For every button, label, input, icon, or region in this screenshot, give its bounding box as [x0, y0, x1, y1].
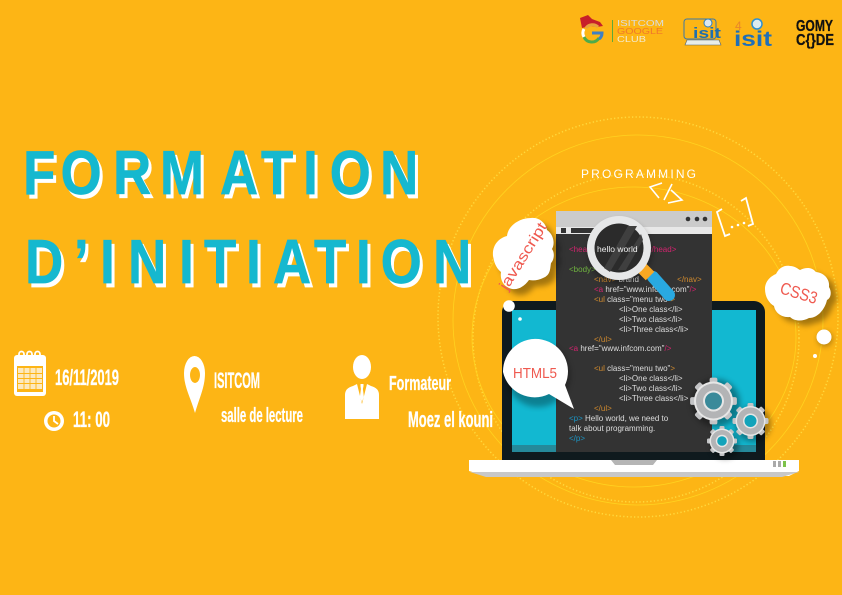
logo: ISITCOM Google Club: ISITCOM [617, 18, 664, 28]
thought dots [503, 300, 832, 358]
title shadow line 2: D’INITIATION [28, 232, 474, 301]
icon: gears [690, 378, 771, 459]
title line 2: D’INITIATION [25, 228, 471, 297]
icon: presenter [345, 355, 379, 419]
code listing: <ul class="menu two"> [594, 364, 675, 373]
code listing: <li>Three class</li> [619, 394, 689, 403]
logo: ISITCOM Google Club: GOOGLE [617, 26, 664, 36]
callout: HTML5 bubble: HTML5 [513, 365, 557, 382]
logo: GOMYCODE: C{}DE [796, 32, 834, 49]
large gear [690, 378, 737, 424]
time: 11: 00 [73, 407, 110, 432]
title [23, 139, 474, 301]
icon: brackets [717, 198, 753, 236]
laptop [469, 301, 799, 477]
icon: magnifying glass: hello world [597, 244, 638, 254]
logo: ISIT keyboard: isit [693, 25, 721, 42]
small gear [707, 426, 737, 456]
code listing: talk about programming. [569, 424, 655, 433]
logo: ISITCOM Google Club: CLUB [617, 34, 647, 44]
code listing: <p> Hello world, we need to [569, 414, 669, 423]
logo: 4th ISIT: 4 [735, 19, 742, 33]
callout: CSS3 cloud [765, 266, 837, 326]
location room: salle de lecture [221, 405, 303, 427]
code listing: </head> [647, 245, 677, 254]
icon: map pin [184, 356, 205, 413]
icon: code tag [650, 183, 682, 203]
logo: 4th ISIT [734, 19, 772, 51]
code listing: <ul class="menu two"> [594, 295, 675, 304]
presenter name: Moez el kouni [408, 407, 493, 432]
callout: javascript cloud [493, 218, 560, 295]
callout: HTML5 bubble [503, 339, 574, 409]
laptop base [469, 460, 799, 477]
decorative orbit rings [438, 117, 838, 517]
code listing: <li>One class</li> [619, 305, 683, 314]
icon: magnifying glass [587, 216, 669, 295]
location name: ISITCOM [214, 368, 260, 393]
code listing: <li>Two class</li> [619, 315, 682, 324]
code listing: <a href="www.infcom.com"/> [594, 285, 697, 294]
logo: GOMYCODE: GOMY [796, 18, 834, 35]
callout: javascript cloud: javascript [495, 219, 551, 294]
code listing: <li>Three class</li> [619, 325, 689, 334]
code listing: </ul> [594, 404, 612, 413]
code listing: <a href="www.infcom.com"/> [569, 344, 672, 353]
logo: 4th ISIT: isit [734, 28, 772, 51]
code listing: </p> [569, 434, 585, 443]
code listing [569, 245, 702, 443]
logo: GOMYCODE [796, 18, 834, 49]
heading: programming: PROGRAMMING [581, 167, 696, 181]
code listing: <nav> brand </nav> [594, 275, 702, 284]
code listing: <body> [569, 265, 596, 274]
code listing: <head> [569, 245, 596, 254]
presenter label: Formateur [389, 373, 451, 395]
callout: CSS3 cloud: CSS3 [778, 279, 820, 308]
title shadow line 1: FORMATION [26, 143, 421, 212]
icon: clock [44, 411, 64, 431]
title line 1: FORMATION [23, 139, 418, 208]
code listing: <li>Two class</li> [619, 384, 682, 393]
logo: ISIT keyboard [684, 19, 721, 45]
code listing: </ul> [594, 335, 612, 344]
code listing: <li>One class</li> [619, 374, 683, 383]
icon: calendar [14, 352, 46, 396]
date: 16/11/2019 [55, 365, 119, 390]
medium gear [732, 403, 768, 439]
logo: ISITCOM Google Club [580, 15, 664, 44]
code window [556, 211, 712, 452]
